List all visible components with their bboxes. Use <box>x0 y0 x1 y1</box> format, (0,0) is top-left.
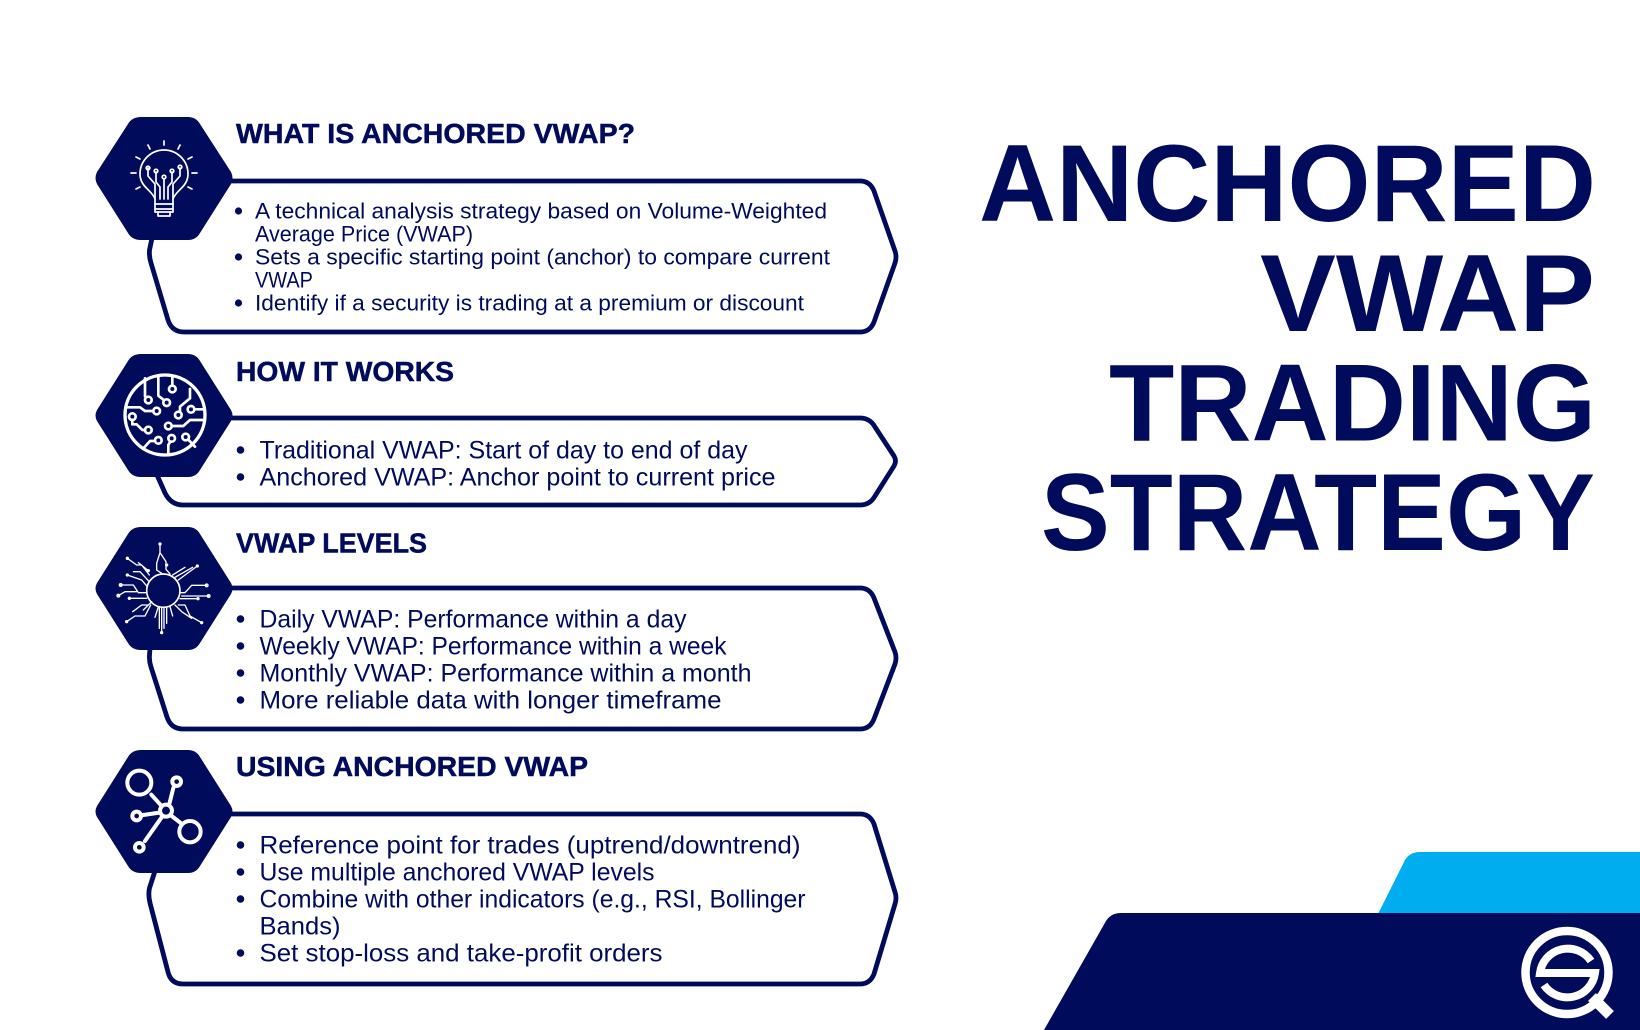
heading: HOW IT WORKS <box>236 356 454 387</box>
bullet list: Anchored VWAP: Anchor point to current price <box>260 464 776 492</box>
title: TRADING <box>1109 342 1596 464</box>
title: VWAP <box>1260 233 1595 355</box>
bullet list: VWAP <box>255 268 313 292</box>
panel outline <box>149 181 896 332</box>
bullet list <box>237 436 775 492</box>
bullet list: More reliable data with longer timeframe <box>260 686 722 714</box>
panel: VWAP levels <box>96 527 896 729</box>
bullet list: Reference point for trades (uptrend/downtrend) <box>260 832 800 860</box>
bullet list: Weekly VWAP: Performance within a week <box>260 632 727 660</box>
bullet list: Use multiple anchored VWAP levels <box>260 858 654 886</box>
heading: VWAP LEVELS <box>236 528 427 558</box>
icon: network nodes <box>127 771 201 852</box>
bullet list <box>235 198 831 316</box>
bottom-right decorative shapes <box>1044 852 1640 1030</box>
icon: circuit circle <box>125 375 205 455</box>
hexagon badge <box>96 750 232 873</box>
bullet list: Combine with other indicators (e.g., RSI, Bollinger <box>260 886 806 914</box>
bullet list: Set stop-loss and take-profit orders <box>260 940 662 968</box>
title: STRATEGY <box>1041 452 1595 574</box>
bullet list: Traditional VWAP: Start of day to end of day <box>260 436 748 464</box>
title <box>979 123 1596 574</box>
bullet list: Bands) <box>260 912 340 940</box>
title: ANCHORED <box>979 123 1596 245</box>
hexagon badge <box>96 117 232 240</box>
bullet list: Average Price (VWAP) <box>255 222 473 246</box>
icon: SQ logo <box>1526 931 1610 1015</box>
panel outline <box>157 418 896 505</box>
bullet list: Monthly VWAP: Performance within a month <box>260 660 752 688</box>
hexagon badge <box>96 354 232 477</box>
panel outline <box>149 588 896 729</box>
panel: how it works <box>96 354 896 505</box>
bullet list: Sets a specific starting point (anchor) to compare current <box>255 244 831 270</box>
bullet list: Identify if a security is trading at a premium or discount <box>255 290 805 316</box>
panel outline <box>149 814 896 984</box>
bullet list <box>237 832 805 968</box>
icon: radial circuit <box>117 543 210 634</box>
heading: USING ANCHORED VWAP <box>236 751 588 782</box>
icon: light bulb with circuit <box>131 141 197 216</box>
bullet list: Daily VWAP: Performance within a day <box>260 606 687 634</box>
bullet list <box>237 606 751 714</box>
panel: what is anchored VWAP <box>96 117 896 332</box>
heading: WHAT IS ANCHORED VWAP? <box>236 118 635 149</box>
bullet list: A technical analysis strategy based on Volume-Weighted <box>255 198 827 224</box>
panel: using anchored VWAP <box>96 750 896 984</box>
hexagon badge <box>96 527 232 650</box>
